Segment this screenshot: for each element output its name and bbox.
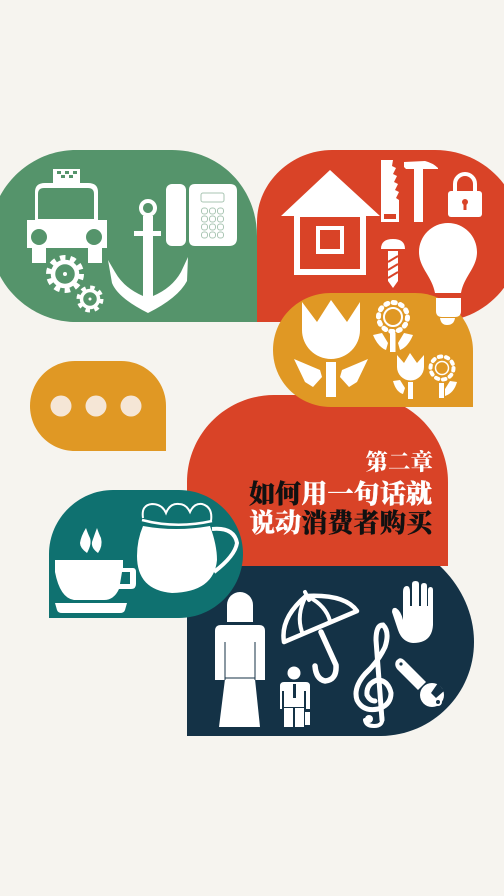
icon: raised hand	[392, 581, 433, 643]
panel: speech bubble with dots	[30, 361, 166, 451]
panel: teal cups bubble	[49, 490, 243, 618]
icon: foamy mug	[137, 504, 237, 593]
icon: woman	[215, 592, 265, 727]
icon: small daisy flower	[430, 356, 457, 398]
icon: businessman	[280, 666, 310, 727]
icon: anchor	[108, 199, 188, 313]
panel: red tools bubble	[257, 150, 504, 322]
panel: navy people bubble	[187, 566, 474, 736]
panel: orange flowers bubble	[273, 293, 473, 407]
icon: padlock	[448, 174, 482, 217]
icon: screw	[381, 239, 405, 288]
icon: small tulip	[393, 353, 424, 399]
icon: hammer	[404, 161, 438, 222]
icon: umbrella	[283, 592, 357, 681]
icon: house	[281, 170, 380, 275]
headline line one: 如何用一句话就	[249, 479, 432, 509]
icon: wrench	[395, 658, 444, 707]
title text block	[249, 449, 435, 538]
icon: light bulb	[419, 223, 477, 325]
icon: taxi	[27, 169, 107, 263]
icon: ellipsis dots	[50, 396, 142, 416]
icon: large tulip	[294, 300, 368, 397]
icon: gears	[48, 258, 102, 310]
icon: telephone	[166, 184, 237, 246]
icon: treble clef	[356, 625, 391, 726]
panel: centre red title bubble	[187, 395, 448, 566]
panel: centre red overlap strip	[187, 540, 448, 566]
icon: steaming coffee cup	[55, 528, 136, 613]
icon: daisy flower	[373, 302, 413, 352]
chapter label: 第二章	[365, 449, 433, 475]
icon: saw	[381, 160, 399, 222]
panel: green transport bubble	[0, 150, 257, 322]
headline line two: 说动消费者购买	[249, 508, 435, 538]
